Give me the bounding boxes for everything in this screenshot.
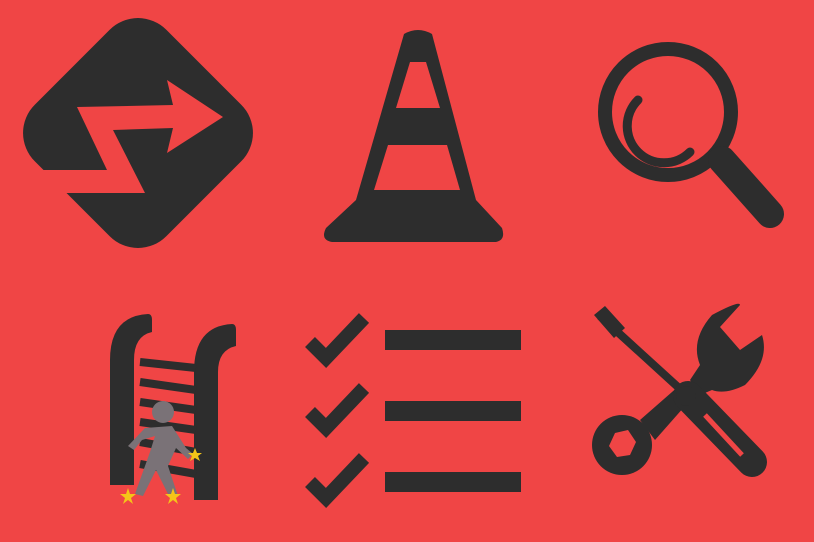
icon: road sign zigzag arrow: [6, 1, 270, 265]
icon: ladder with person: [110, 314, 236, 504]
icon: checklist: [310, 318, 521, 498]
icon: traffic cone: [324, 30, 503, 242]
icon: magnifying glass: [605, 49, 770, 214]
icon: tools screwdriver and wrench: [592, 304, 764, 475]
